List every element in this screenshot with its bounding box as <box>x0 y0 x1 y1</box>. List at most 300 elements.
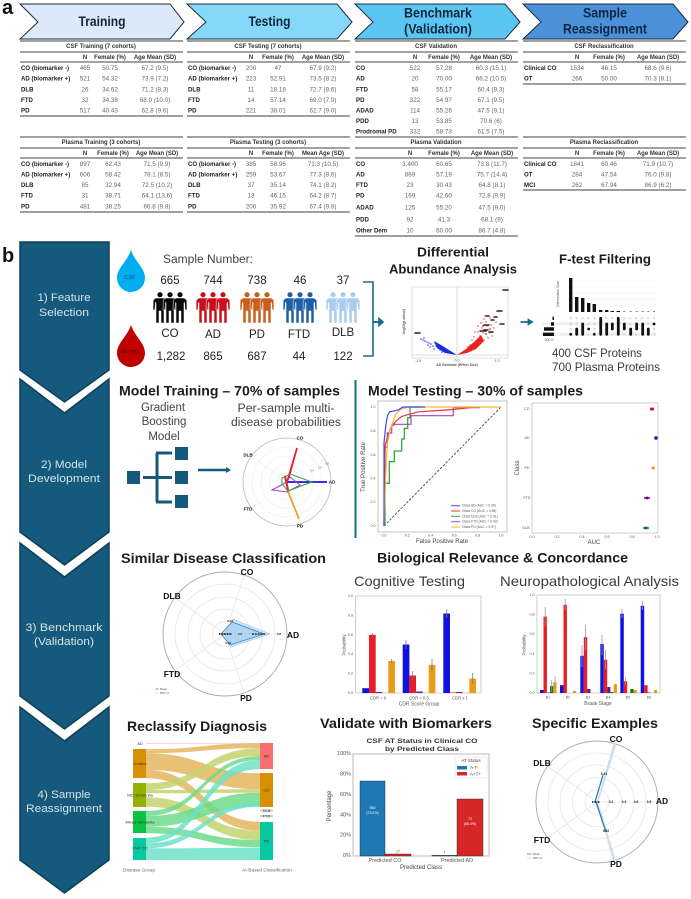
chart: CSF AT status bars: 100% <box>337 751 351 757</box>
table: Plasma Reclassification: 60.46 <box>601 161 617 168</box>
protein count text: 700 Plasma Proteins <box>552 360 660 374</box>
table: Plasma Testing: 77.3 (8.6) <box>310 172 336 178</box>
table: CSF Training: N <box>83 55 87 61</box>
chart: neuropathological bars: 0.4 <box>530 652 534 656</box>
arrow to F-test <box>521 319 533 325</box>
chart: ROC curve: Class DLB (AUC = 0.91) <box>462 514 498 518</box>
table: Plasma Reclassification: 71.9 (10.7) <box>643 161 673 168</box>
table: Plasma Testing: Female (%) <box>262 151 294 157</box>
arrow to radar <box>198 467 231 473</box>
table: Plasma Validation: 869 <box>405 172 416 178</box>
chart: ROC curve: Class FTD (AUC = 0.92) <box>462 520 498 524</box>
label: Gradient Boosting Model: Model <box>148 431 180 443</box>
table: Plasma Validation: 64.8 (8.1) <box>479 182 505 189</box>
chart: cognitive testing bars: 0.0 <box>348 691 353 695</box>
table: Plasma Validation: CO <box>356 161 365 168</box>
chart: neuropathological bars: B5 <box>626 696 630 700</box>
table: Plasma Training: 897 <box>80 161 91 168</box>
heading: Differential Abundance Analysis: Differential <box>417 244 489 260</box>
chart: CSF AT status bars: AT Status <box>461 758 481 763</box>
chart: ROC curve: 0.0 <box>382 534 386 538</box>
table: Plasma Training: 31 <box>81 192 89 200</box>
table: CSF Training: Age Mean (SD) <box>134 55 176 61</box>
disease group labels: PD <box>249 329 265 341</box>
chart: ROC curve: 0.8 <box>475 534 480 538</box>
table: CSF Validation: Age Mean (SD) <box>470 55 512 61</box>
table: CSF Validation: 322 <box>410 97 421 104</box>
chevron: Training: Training <box>78 14 126 29</box>
chart: AUC by class: Class <box>515 460 521 476</box>
table: Plasma Validation: Age Mean (SD) <box>471 151 513 157</box>
bracket arrow into differential abundance <box>363 282 383 356</box>
chart: specific example radar <box>527 734 668 869</box>
chart: upset plot: 300 0 <box>544 338 554 342</box>
protein count text <box>552 346 660 374</box>
chart: volcano plot: AD Estimate (Effect Size) <box>436 363 478 367</box>
table: Plasma Validation: 41.3 <box>438 216 451 224</box>
chart: volcano plot: -log10(p-value) <box>402 308 406 335</box>
chart: specific example radar: PD <box>610 859 622 869</box>
chart: neuropathological bars: 1.0 <box>530 593 534 597</box>
heading: Biological Relevance and Concordance: Biological Relevance & Concordance <box>377 550 629 566</box>
chart: ROC curve: True Positive Rate <box>361 441 367 492</box>
chart: sankey reclassification: MCI Dementia <box>127 792 154 798</box>
chart: similar disease radar: AD <box>287 630 299 640</box>
step arrow 1: Feature Selection <box>20 242 109 402</box>
table: CSF Testing: 221 <box>246 108 257 114</box>
table: CSF Testing: 67.9 (9.2) <box>310 65 336 72</box>
heading: Model Training: Model Training – 70% of samples <box>119 384 340 398</box>
table: Plasma Training <box>20 137 183 212</box>
chart: sankey reclassification: FTD <box>263 814 270 818</box>
table: CSF Testing: AD (biomarker +) <box>188 76 237 82</box>
step arrow 2: Model Development <box>20 379 109 565</box>
CSF sample counts <box>160 275 349 287</box>
chart: CSF AT status bars: 60% <box>340 792 351 798</box>
subheading: Cognitive Testing: Cognitive Testing <box>354 573 465 589</box>
table: Plasma Testing: DLB <box>188 182 201 189</box>
chart: ROC curve <box>361 401 507 545</box>
chart: specific example radar: 0.8 <box>647 800 651 804</box>
chart: CSF AT status bars: 72 <box>468 817 472 821</box>
chart: sankey reclassification: AD <box>137 741 143 746</box>
chart: specific example radar: CO <box>610 734 623 744</box>
table: Plasma Validation: Plasma Validation <box>410 140 462 146</box>
table: CSF Training: CO (biomarker -) <box>21 65 69 72</box>
icon: gradient boosting tree <box>127 447 188 508</box>
chart: neuropathological bars: 0.0 <box>530 691 534 695</box>
chart: multi-disease radar: CO <box>297 436 304 440</box>
chart: neuropathological bars: Probability <box>522 634 526 656</box>
table: Plasma Training: PD <box>21 204 30 210</box>
table: CSF Validation <box>355 41 518 136</box>
chart: CSF AT status bars: CSF AT Status in Clinical CO <box>366 738 478 745</box>
chart: AUC by class: PD <box>524 466 530 470</box>
table: CSF Validation: PD <box>356 97 365 104</box>
table: Plasma Testing: 13 <box>247 192 255 200</box>
table: CSF Reclassification: OT <box>524 76 533 82</box>
table: Plasma Training: 85 <box>81 182 89 189</box>
label: per-sample probabilities: Per-sample multi- <box>238 403 335 415</box>
table: Plasma Reclassification: MCI <box>524 182 535 189</box>
people icon: AD <box>196 292 230 323</box>
heading: F-test Filtering: F-test Filtering <box>559 252 651 266</box>
table: Plasma Validation: 73.8 (11.7) <box>477 161 507 168</box>
chart: ROC curve: Class PD (AUC = 0.97) <box>462 525 496 529</box>
plasma sample counts: 687 <box>247 351 267 363</box>
chart: multi-disease radar <box>243 436 336 528</box>
label: Gradient Boosting Model: Boosting <box>142 416 186 428</box>
chart: multi-disease radar: FTD <box>244 506 253 512</box>
table: CSF Training: 54.32 <box>102 76 118 82</box>
chart: cognitive testing bars: CDR Score Group <box>399 702 439 708</box>
table: Plasma Testing: 35.92 <box>270 204 286 210</box>
table: CSF Testing: DLB <box>188 86 201 94</box>
chart: cognitive testing bars: Probability <box>342 634 346 656</box>
table: CSF Testing: 223 <box>246 76 257 82</box>
chart: CSF AT status bars: Percentage <box>327 790 333 821</box>
table: Plasma Testing: Plasma Testing (3 cohorts) <box>230 140 306 146</box>
label: per-sample probabilities <box>231 403 341 429</box>
chart: volcano plot: 1.0 <box>494 359 500 363</box>
table: Plasma Testing: 37 <box>247 182 255 189</box>
chart: AUC by class: AUC <box>588 540 601 546</box>
chart: neuropathological bars: B3 <box>586 696 590 700</box>
table: Plasma Training: 78.1 (8.5) <box>144 172 170 178</box>
table: CSF Validation: 114 <box>410 108 421 114</box>
disease group labels: AD <box>205 329 221 341</box>
heading: Validate with Biomarkers: Validate with Biomarkers <box>320 715 492 731</box>
table: CSF Testing: FTD <box>188 97 200 104</box>
table: Plasma Testing: 74.1 (8.2) <box>310 182 336 189</box>
chart: ROC curve: Class CO (AUC = 0.96) <box>462 509 496 513</box>
label: Gradient Boosting Model: Gradient <box>141 402 186 414</box>
chart: multi-disease radar: 0.6 <box>318 466 322 470</box>
chevron: Training <box>20 4 184 39</box>
chart: similar disease radar: 0.19 <box>225 641 231 645</box>
table: Plasma Reclassification: N <box>575 151 579 157</box>
icon: CSF drop <box>117 250 145 292</box>
chevron: Sample Reassignment <box>523 4 688 39</box>
subheading: Neuropathological Analysis: Neuropathological Analysis <box>500 573 679 589</box>
chart: specific example radar: 95% CI <box>533 856 542 860</box>
table: Plasma Testing: FTD <box>188 192 200 200</box>
table: Plasma Validation: 47.5 (9.0) <box>479 204 505 212</box>
table: CSF Training: DLB <box>21 86 34 94</box>
chart: specific example radar: 0.43 <box>601 772 607 776</box>
table: Plasma Validation: 72.8 (9.9) <box>479 192 505 200</box>
table: Plasma Training: 71.5 (9.9) <box>144 161 170 168</box>
table: Plasma Training: Age Mean (SD) <box>136 151 178 157</box>
table: CSF Reclassification: 266 <box>572 76 583 82</box>
chart: similar disease radar: 0.2 <box>238 632 242 636</box>
table: Plasma Validation: 42.60 <box>436 192 452 200</box>
chart: AUC by class: FTD <box>524 496 531 500</box>
chart: CSF AT status bars: Predicted CO <box>368 858 402 864</box>
table: Plasma Training: DLB <box>21 182 34 189</box>
table: CSF Validation: PDD <box>356 118 369 125</box>
table: Plasma Training: 62.43 <box>105 161 121 168</box>
chart: neuropathological bars: B2 <box>566 696 570 700</box>
chart: CSF AT status bars: 550 <box>370 806 375 810</box>
table: CSF Testing: N <box>249 55 253 61</box>
table: CSF Testing: 11 <box>248 86 255 94</box>
chart: similar disease radar: 0.8 <box>277 632 281 636</box>
protein count text: 400 CSF Proteins <box>552 346 642 360</box>
step arrow 1: Feature Selection: 1) Feature <box>38 292 90 304</box>
chart: sankey reclassification: AI-Based Classification <box>242 868 293 872</box>
table: CSF Testing: 14 <box>247 97 255 104</box>
chart: ROC curve: 0.6 <box>370 453 376 457</box>
table: CSF Testing: 69.0 (7.0) <box>310 97 336 104</box>
chevron: Testing: Testing <box>248 14 290 29</box>
chart: AUC by class: 0.8 <box>630 535 634 539</box>
table: CSF Validation: 60.4 (9.3) <box>478 86 504 94</box>
table: CSF Validation: N <box>413 55 417 61</box>
chart: volcano plot: 0.0 <box>454 358 460 362</box>
heading: Model Testing: Model Testing – 30% of samples <box>368 384 583 398</box>
chart: neuropathological bars: 0.6 <box>530 632 534 636</box>
table: Plasma Testing: 64.2 (8.7) <box>310 192 336 200</box>
table: Plasma Validation: ADAD <box>356 204 374 212</box>
chart: sankey reclassification: Disease Group <box>123 868 156 872</box>
chart: CSF AT status bars <box>327 738 489 871</box>
table: Plasma Validation: AD <box>356 172 365 178</box>
CSF sample counts: 744 <box>203 275 223 287</box>
table: CSF Testing: Female (%) <box>262 55 294 61</box>
chart: cognitive testing bars: CDR ≥ 1 <box>452 696 469 700</box>
chart: cognitive testing bars: 1.0 <box>348 594 353 598</box>
CSF sample counts: 738 <box>247 275 267 287</box>
table: Plasma Validation: 55.20 <box>436 204 452 212</box>
chart: neuropathological bars: 0.8 <box>530 613 534 617</box>
chart: similar disease radar: 95% CI <box>160 691 169 695</box>
chevron: Benchmark (Validation): Benchmark <box>404 6 472 20</box>
table: Plasma Training: 481 <box>80 204 91 210</box>
table: Plasma Validation: 30.43 <box>436 182 452 189</box>
chart: CSF AT status bars: Predicted Class <box>400 865 442 871</box>
table: Plasma Training: N <box>83 151 87 157</box>
step arrow 3: Benchmark (Validation): (Validation) <box>34 636 94 648</box>
chart: cognitive testing bars: 0.6 <box>348 633 353 637</box>
table: Plasma Training: 64.1 (13.6) <box>142 192 172 200</box>
chart: neuropathological bars: 0.2 <box>530 671 534 675</box>
table: CSF Training: PD <box>21 108 30 114</box>
chart: specific example radar: 0.52 <box>603 829 609 833</box>
table: Plasma Reclassification: Age Mean (SD) <box>637 151 679 157</box>
table: CSF Validation: 67.1 (9.5) <box>478 97 504 104</box>
table: CSF Testing: 18.18 <box>270 86 286 94</box>
disease group labels: DLB <box>332 327 355 339</box>
table: CSF Testing: 52.91 <box>270 76 286 82</box>
table: CSF Training: 71.2 (8.3) <box>142 86 168 94</box>
chart: AUC by class <box>515 403 660 546</box>
chart: ROC curve: 0.6 <box>452 534 457 538</box>
table: CSF Training: 34.62 <box>102 86 118 94</box>
table: Plasma Training: AD (biomarker +) <box>21 172 70 178</box>
chart: CSF AT status bars: 0% <box>343 853 351 859</box>
table: Plasma Reclassification: Female (%) <box>593 151 625 157</box>
panel label b: b <box>2 245 14 267</box>
CSF sample counts: 665 <box>160 275 180 287</box>
table: CSF Testing: 62.7 (9.0) <box>310 108 336 114</box>
step arrow 2: Model Development: Development <box>28 473 100 485</box>
chart: AUC by class: 0.2 <box>554 535 560 539</box>
step arrow 1: Feature Selection: Selection <box>39 307 89 319</box>
chart: neuropathological bars: B4 <box>606 696 610 700</box>
chart: ROC curve: 0.4 <box>370 477 376 481</box>
table: CSF Validation: 55.26 <box>436 108 452 114</box>
chart: cognitive testing bars: 0.2 <box>348 672 353 676</box>
table: CSF Validation: 60.3 (15.1) <box>476 65 506 72</box>
table: Plasma Validation: 86.7 (4.8) <box>479 228 505 234</box>
chart: CSF AT status bars: 40% <box>340 812 351 818</box>
chart: cognitive testing bars: CDR = 0 <box>370 696 387 700</box>
table: CSF Training: 68.0 (10.0) <box>140 97 170 104</box>
table: CSF Training <box>20 41 183 116</box>
table: Plasma Testing: 35.14 <box>270 182 286 189</box>
table: Plasma Training: 58.42 <box>105 172 121 178</box>
chart: volcano plot: -1.0 <box>415 359 421 363</box>
chevron: Benchmark (Validation) <box>355 4 520 39</box>
table: CSF Training: 73.9 (7.2) <box>142 76 168 82</box>
table: CSF Reclassification: 68.6 (9.6) <box>645 65 671 72</box>
table: CSF Testing: 47 <box>274 65 282 72</box>
people icon: CO <box>153 292 187 323</box>
table: Plasma Reclassification: OT <box>524 172 533 178</box>
table: CSF Training: 32 <box>81 97 89 104</box>
table: CSF Validation: 13 <box>411 118 419 125</box>
people icon: FTD <box>283 292 317 323</box>
icon: CSF drop: CSF <box>124 275 136 281</box>
chevron: Sample Reassignment: Sample <box>583 6 627 20</box>
table: Plasma Validation: 169 <box>405 192 416 200</box>
table: CSF Reclassification <box>523 41 686 84</box>
chart: ROC curve: 1.0 <box>370 405 376 409</box>
table: CSF Testing: 72.7 (8.6) <box>310 86 336 94</box>
plasma sample counts <box>157 351 353 363</box>
table: Plasma Training: Plasma Training (3 cohorts) <box>62 140 140 146</box>
people icon: PD <box>240 292 274 323</box>
chart: sankey reclassification: DLB <box>263 808 271 813</box>
table: CSF Validation: 66.2 (10.5) <box>476 76 506 82</box>
plasma sample counts: 44 <box>293 351 306 363</box>
table: Plasma Testing: Mean Age (SD) <box>302 151 344 157</box>
table: CSF Reclassification: 70.3 (8.1) <box>645 76 671 82</box>
table: CSF Testing: Age Mean (SD) <box>302 55 344 61</box>
heading: Reclassify Diagnosis: Reclassify Diagnosis <box>127 718 267 734</box>
chart: similar disease radar: 0.23 <box>227 619 233 623</box>
chart: neuropathological bars <box>522 593 660 707</box>
people icon: DLB <box>326 292 360 323</box>
table: CSF Training: 26 <box>81 86 89 94</box>
table: CSF Training: 465 <box>80 65 91 72</box>
table: Plasma Testing: PD <box>188 204 197 210</box>
chart: ROC curve: 0.2 <box>370 500 376 504</box>
table: CSF Reclassification: CSF Reclassification <box>574 44 634 50</box>
chart: ROC curve: Class AD (AUC = 0.99) <box>462 504 496 508</box>
chart: similar disease radar: DLB <box>163 591 181 601</box>
chart: multi-disease radar: AD <box>329 480 336 484</box>
chart: AUC by class: 0.0 <box>530 535 534 539</box>
table: Plasma Training: 66.8 (9.8) <box>144 204 170 210</box>
chart: sankey reclassification: CO <box>264 788 270 792</box>
table: Plasma Training: Female (%) <box>97 151 129 157</box>
chart: ROC curve: 0.0 <box>370 524 376 528</box>
table: Plasma Validation: 3,400 <box>402 161 418 168</box>
table: Plasma Testing: 58.96 <box>270 161 286 168</box>
table: CSF Reclassification: N <box>575 55 579 61</box>
table: Plasma Testing: 46.15 <box>270 192 286 200</box>
table: CSF Validation: CSF Validation <box>415 44 457 50</box>
chart: AUC by class: CO <box>524 407 530 411</box>
step arrow 3: Benchmark (Validation) <box>20 543 109 729</box>
CSF sample counts: 37 <box>337 275 349 287</box>
table: CSF Validation: ADAD <box>356 108 374 114</box>
table: Plasma Testing: AD (biomarker +) <box>188 172 237 178</box>
chart: upset plot: Intersection Size <box>556 281 560 307</box>
table: Plasma Validation: 23 <box>406 182 414 189</box>
table: CSF Training: AD (biomarker +) <box>21 76 70 82</box>
table: Plasma Reclassification: 67.94 <box>601 182 617 189</box>
chart: sankey reclassification: Mixed Dementia <box>126 820 155 824</box>
chart: ROC curve: False Positive Rate <box>416 539 469 545</box>
table: CSF Reclassification: 46.15 <box>601 65 617 72</box>
chart: ROC curve: 0.2 <box>405 534 410 538</box>
table: Plasma Training: 72.5 (10.2) <box>142 182 172 189</box>
table: CSF Testing: CO (biomarker -) <box>188 65 236 72</box>
table: CSF Validation: 522 <box>410 65 421 72</box>
chart: neuropathological bars: B6 <box>647 696 651 700</box>
chart: specific example radar: 0.4 <box>622 800 626 804</box>
table: CSF Testing: 200 <box>246 65 257 72</box>
chart: multi-disease radar: 0.4 <box>310 470 314 472</box>
plasma sample counts: 122 <box>333 351 353 363</box>
table: Plasma Reclassification: 284 <box>572 172 583 178</box>
table: Plasma Validation <box>355 137 518 236</box>
chart: similar disease radar: Mean <box>160 687 167 691</box>
label: per-sample probabilities: disease probabilities <box>231 417 341 429</box>
table: Plasma Reclassification: 1841 <box>570 161 584 168</box>
chart: cognitive testing bars: CDR = 0.5 <box>409 696 430 700</box>
heading: Differential Abundance Analysis: Abundance Analysis <box>389 262 517 276</box>
plasma sample counts: 865 <box>203 351 223 363</box>
plasma sample counts: 1,282 <box>157 351 185 363</box>
chevron: Benchmark (Validation): (Validation) <box>404 22 472 36</box>
step arrow 3: Benchmark (Validation): 3) Benchmark <box>26 622 103 634</box>
chart: CSF AT status bars: 1 <box>444 850 446 854</box>
disease group labels: FTD <box>288 329 310 341</box>
table: Plasma Validation: 68.1 (9) <box>481 216 503 224</box>
CSF sample counts: 46 <box>294 275 306 287</box>
table: CSF Validation: 58.73 <box>436 128 452 136</box>
table: Plasma Validation: 125 <box>405 204 416 212</box>
chart: CSF AT status bars: 20% <box>340 832 351 838</box>
chart: similar disease radar <box>155 567 299 703</box>
table: Plasma Validation: Other Dem <box>356 228 388 234</box>
chart: similar disease radar: CO <box>241 567 254 577</box>
table: CSF Validation: 47.5 (9.1) <box>478 108 504 114</box>
label: Gradient Boosting Model <box>141 402 186 443</box>
table: Plasma Reclassification: 47.54 <box>601 172 617 178</box>
table: CSF Training: 517 <box>80 108 91 114</box>
table: CSF Validation: 57.28 <box>436 65 452 72</box>
table: CSF Validation: 20 <box>411 76 419 82</box>
table: CSF Training: 40.43 <box>102 108 118 114</box>
disease group labels <box>161 327 355 341</box>
chart: ROC curve: 0.4 <box>428 534 433 538</box>
divider line between training and testing <box>354 380 356 538</box>
